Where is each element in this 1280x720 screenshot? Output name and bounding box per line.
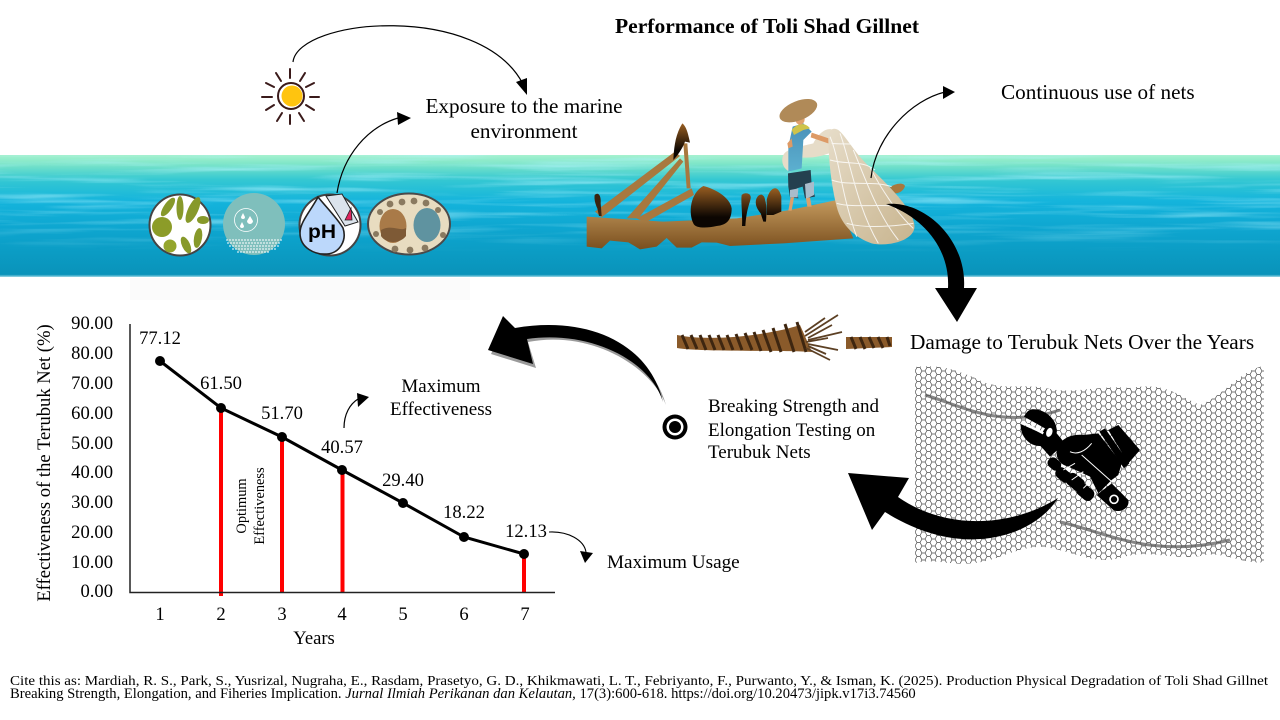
data labels: 18.22: [443, 502, 485, 523]
citation: Breaking Strength, Elongation, and Fiheries Implication. Jurnal Ilmiah Perikanan dan Kelautan, 17(3):600-618. https://doi.org/10.20473/jipk.v17i3.74560: [10, 686, 916, 702]
text: breaking strength testing: Breaking Strength and: [708, 396, 879, 417]
x tick labels: 5: [398, 604, 408, 625]
citation: Cite this as: Mardiah, R. S., Park, S., Yusrizal, Nugraha, E., Rasdam, Prasetyo, G. D., Khikmawati, L. T., Febriyanto, F., Purwanto, Y., & Isman, K. (2025). Production Physical Degradation of Toli Shad Gillnet: [10, 673, 1268, 689]
icon: pH circle: pH: [308, 222, 336, 243]
cuff: [1099, 425, 1140, 468]
wrench: [1021, 409, 1065, 457]
arrow: net to continuous use: [871, 86, 955, 178]
data labels: 12.13: [505, 521, 547, 542]
icon: pH circle: [300, 194, 360, 256]
arrow: boat to damaged nets: [886, 204, 977, 322]
data labels: 29.40: [382, 470, 424, 491]
arrow: maximum usage: [549, 532, 593, 563]
arm: [811, 133, 832, 144]
text: continuous use of nets: Continuous use of nets: [1001, 80, 1195, 104]
icon: sun: [262, 69, 319, 124]
data line: [160, 361, 524, 554]
arrow: net to testing: [848, 473, 1058, 539]
x tick labels: 3: [277, 604, 287, 625]
small cargo items: [741, 188, 781, 226]
x tick labels: 4: [337, 604, 347, 625]
y tick labels: 90.00: [71, 313, 113, 334]
icon: frayed rope: [677, 315, 892, 360]
arrow: maximum effectiveness: [344, 393, 369, 428]
x tick labels: 6: [459, 604, 469, 625]
y tick labels: 30.00: [71, 492, 113, 513]
y tick labels: 20.00: [71, 522, 113, 543]
cargo pot: [691, 186, 732, 228]
x axis title: Years: [293, 628, 335, 649]
stern post: [594, 194, 602, 216]
y tick labels: 0.00: [80, 581, 113, 602]
arrow: pH to exposure: [337, 112, 411, 193]
y tick labels: 10.00: [71, 552, 113, 573]
y tick labels: 70.00: [71, 373, 113, 394]
head and hat: [795, 114, 805, 125]
icon: target marker: [662, 414, 688, 440]
y tick labels: [71, 313, 113, 602]
boat mast frame: [595, 143, 694, 223]
text: maximum usage: Maximum Usage: [607, 552, 740, 573]
fisherman: [776, 94, 832, 211]
data points: [155, 356, 529, 559]
boat hull: [587, 200, 853, 249]
x tick labels: 2: [216, 604, 226, 625]
text: damage to terubuk nets: Damage to Terubuk Nets Over the Years: [910, 330, 1254, 354]
illustration: damaged net: [915, 360, 1265, 570]
axes: [130, 324, 555, 592]
data labels: 77.12: [139, 328, 181, 349]
arrow: testing to chart: [488, 316, 666, 405]
x tick labels: 1: [155, 604, 165, 625]
x tick labels: 7: [520, 604, 530, 625]
data labels: 51.70: [261, 403, 303, 424]
icon: algae circle: [150, 194, 210, 256]
y axis title: Effectiveness of the Terubuk Net (%): [34, 324, 55, 602]
gathered net bundle: [782, 129, 833, 172]
net cone: [828, 129, 914, 244]
optimum effectiveness label: Effectiveness: [252, 467, 268, 545]
y tick labels: 60.00: [71, 403, 113, 424]
shirt: [788, 123, 812, 172]
optimum effectiveness label: Optimum: [234, 478, 250, 534]
water band background: [0, 155, 1280, 277]
text: exposure to the marine environment: Exposure to the marine: [425, 94, 623, 118]
y tick labels: 40.00: [71, 462, 113, 483]
text: breaking strength testing: Elongation Testing on: [708, 420, 876, 441]
title: Performance of Toli Shad Gillnet: [615, 14, 919, 38]
data labels: 61.50: [200, 373, 242, 394]
boat stern tip: [890, 184, 905, 193]
icon: teal water circle: [223, 193, 285, 255]
icon: sediment oval: [368, 194, 450, 254]
y tick labels: 80.00: [71, 343, 113, 364]
bird on mast: [673, 123, 690, 160]
text: breaking strength testing: Terubuk Nets: [708, 442, 811, 463]
red drop lines: [221, 408, 524, 596]
text: maximum effectiveness: Maximum: [401, 376, 481, 397]
line chart: [34, 313, 555, 649]
text: maximum effectiveness: Effectiveness: [390, 399, 492, 420]
y tick labels: 50.00: [71, 433, 113, 454]
arrow shadow: [491, 320, 666, 405]
data labels: 40.57: [321, 437, 363, 458]
data labels: [139, 328, 547, 542]
fist: [1057, 433, 1122, 493]
legs: [788, 170, 815, 198]
net mesh lines: [830, 133, 913, 243]
text: exposure to the marine environment: environment: [470, 119, 578, 143]
illustration: fisherman on boat with net: [587, 94, 914, 249]
arrow: sun to exposure: [293, 26, 527, 95]
icon: hand holding wrench: [1021, 409, 1140, 511]
soft shadow below water: [130, 278, 470, 300]
x tick labels: [155, 604, 530, 625]
